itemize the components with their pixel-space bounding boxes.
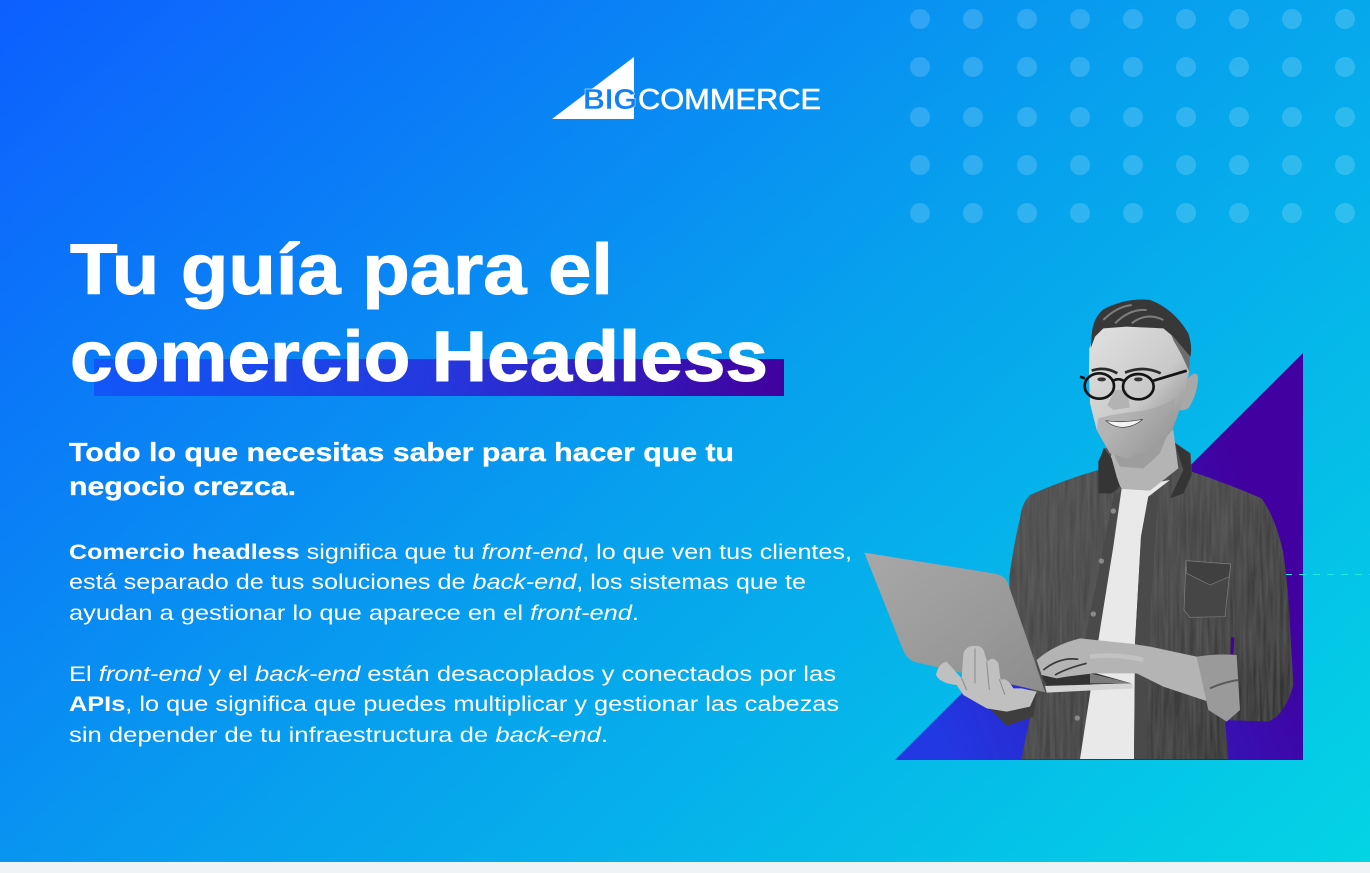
title highlight bar bbox=[94, 359, 784, 396]
collar bbox=[1098, 443, 1192, 498]
logo: BigCommerce: BIG bbox=[583, 84, 637, 116]
eyebrows bbox=[1092, 369, 1161, 373]
purple gap between arm and torso bbox=[1231, 637, 1234, 655]
nose shadow bbox=[1107, 390, 1130, 410]
hair bbox=[1091, 300, 1191, 357]
decorative triangle behind person bbox=[895, 353, 1303, 760]
dot pattern bbox=[910, 9, 1355, 223]
neck bbox=[1110, 430, 1178, 491]
glasses bbox=[1080, 371, 1187, 399]
paragraph 1: Comercio headless significa que tu front-end , lo que ven tus clientes, bbox=[69, 540, 852, 564]
title: comercio Headless bbox=[70, 318, 768, 397]
logo: BigCommerce bbox=[552, 57, 821, 119]
t-shirt bbox=[1080, 480, 1170, 759]
hand highlights bbox=[1090, 656, 1143, 660]
paragraph 2 bbox=[69, 662, 839, 747]
rolled cuff bbox=[1197, 654, 1240, 722]
title: Tu guía para el bbox=[70, 231, 613, 310]
smile bbox=[1106, 419, 1143, 427]
paragraph 2: El front-end y el back-end están desacoplados y conectados por las bbox=[69, 662, 836, 686]
person with laptop bbox=[864, 300, 1293, 759]
finger shadows bbox=[962, 648, 1005, 695]
head bbox=[1080, 300, 1198, 458]
subtitle bbox=[69, 437, 734, 501]
paragraph 1: ayudan a gestionar lo que aparece en el front-end . bbox=[69, 601, 639, 625]
bottom strip bbox=[0, 862, 1370, 873]
side hair fade bbox=[1170, 332, 1190, 372]
shirt bbox=[1009, 443, 1293, 759]
logo: BigCommerce: COMMERCE bbox=[638, 84, 821, 116]
left sleeve cuff bbox=[989, 693, 1037, 726]
subtitle: Todo lo que necesitas saber para hacer que tu bbox=[69, 437, 734, 467]
shirt placket bbox=[1085, 492, 1158, 759]
pocket flap bbox=[1186, 561, 1231, 585]
laptop base bbox=[1045, 683, 1133, 693]
title bbox=[70, 231, 768, 397]
trackpad area bbox=[1090, 673, 1132, 683]
paragraph 2: sin depender de tu infraestructura de back-end . bbox=[69, 723, 608, 747]
shirt buttons bbox=[1075, 508, 1116, 721]
face bbox=[1089, 323, 1189, 458]
finger gap bbox=[1043, 659, 1087, 675]
eyes bbox=[1097, 377, 1106, 381]
paragraph 1 bbox=[69, 540, 852, 625]
holding hand bbox=[936, 646, 1037, 712]
stubble bbox=[1097, 398, 1175, 458]
dashed cyan line bbox=[1285, 574, 1370, 576]
pocket bbox=[1184, 561, 1231, 617]
typing hand and forearm bbox=[1037, 638, 1208, 702]
laptop keyboard bbox=[1042, 672, 1132, 686]
subtitle: negocio crezca. bbox=[69, 471, 296, 501]
hands and laptop base bbox=[936, 638, 1240, 722]
cuff crease bbox=[1210, 680, 1238, 688]
ear bbox=[1177, 374, 1198, 410]
paragraph 2: APIs , lo que significa que puedes multiplicar y gestionar las cabezas bbox=[69, 692, 839, 716]
hair highlights bbox=[1103, 305, 1163, 323]
neck shadow bbox=[1113, 437, 1167, 468]
laptop lid bbox=[864, 553, 1045, 692]
paragraph 1: está separado de tus soluciones de back-end , los sistemas que te bbox=[69, 570, 806, 594]
